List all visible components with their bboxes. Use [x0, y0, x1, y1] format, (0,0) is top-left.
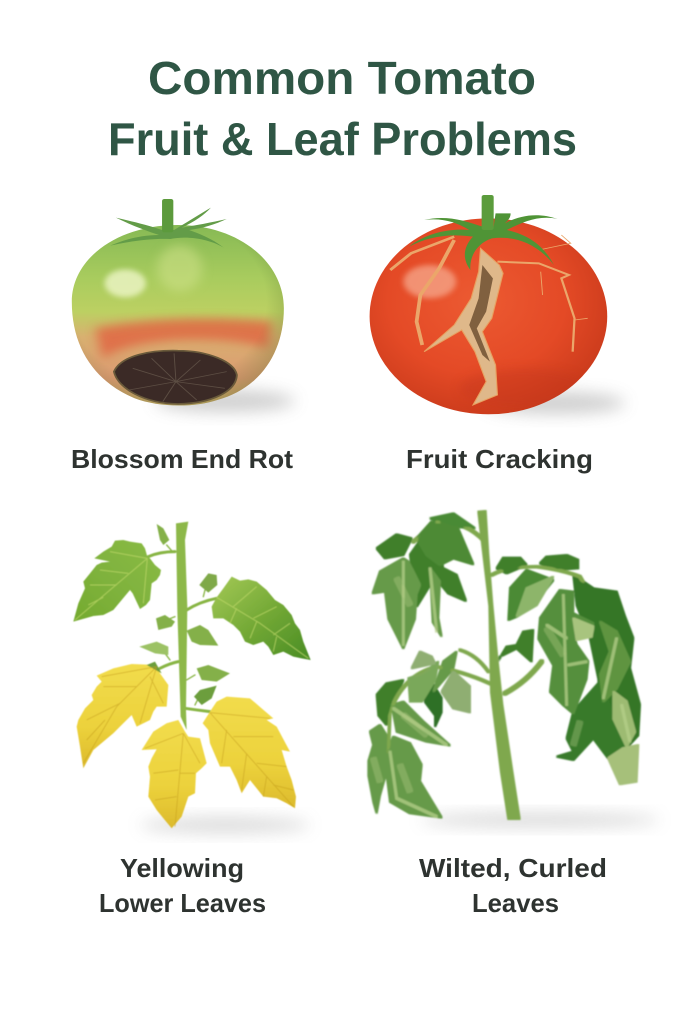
- label: wilted, curled leaves: Leaves: [472, 888, 559, 918]
- icon: cracked red tomato: [370, 195, 607, 414]
- label: yellowing lower leaves: [99, 853, 266, 918]
- icon: green tomato with rot: [65, 199, 291, 412]
- title: Fruit & Leaf Problems: [108, 113, 577, 165]
- label: wilted, curled leaves: [419, 853, 607, 918]
- label: yellowing lower leaves: Yellowing: [120, 853, 244, 883]
- icon: wilted plant: [368, 511, 640, 819]
- panel: yellowing lower leaves: [73, 522, 311, 833]
- panel: blossom end rot: [65, 199, 295, 412]
- label: yellowing lower leaves: Lower Leaves: [99, 888, 266, 918]
- title: Common Tomato: [148, 52, 536, 104]
- label: wilted, curled leaves: Wilted, Curled: [419, 853, 607, 883]
- label: fruit cracking: Fruit Cracking: [406, 444, 593, 474]
- tomato shadow: [155, 390, 295, 412]
- plant shadow: [420, 813, 660, 827]
- panel: fruit cracking: [370, 195, 625, 414]
- panel: wilted, curled leaves: [368, 511, 660, 827]
- infographic canvas: [72, 62, 653, 912]
- icon: yellowing plant: [73, 522, 311, 828]
- title: [108, 52, 577, 165]
- tomato shadow: [485, 392, 625, 414]
- plant shadow: [140, 817, 310, 833]
- label: blossom end rot: Blossom End Rot: [71, 444, 293, 474]
